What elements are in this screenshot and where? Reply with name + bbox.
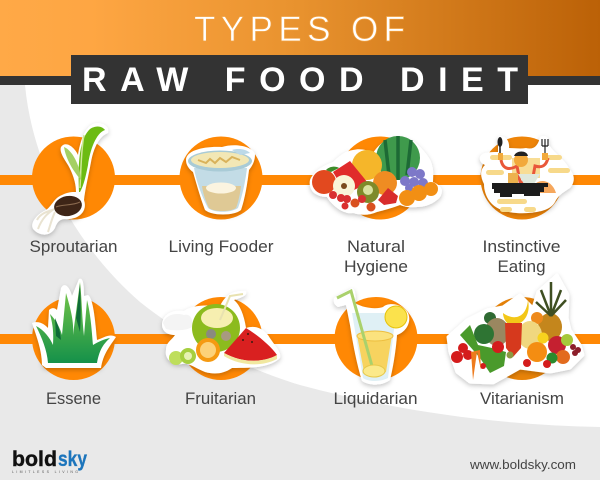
item: Fruitarian [162,291,280,408]
item: Sproutarian [30,123,118,256]
label: Living Fooder: Living Fooder [168,237,274,256]
item: Instinctive Eating [480,136,574,276]
title box [71,55,528,104]
icon: yogurt cup [186,145,255,214]
connector line: row 2 [0,334,600,344]
label: Liquidarian: Liquidarian [334,389,418,408]
logo: boldsky [12,448,87,474]
logo: boldsky: LIMITLESS LIVING [12,470,78,474]
item: Essene [32,279,116,408]
background: white curved panel [25,85,600,427]
item: Instinctive Eating: Eating [498,257,546,276]
icon: grass [32,279,116,368]
label: Vitarianism: Vitarianism [480,389,564,408]
logo: boldsky: bold [12,448,57,471]
title line 2: RAW FOOD DIET [82,61,518,99]
label: Sproutarian: Sproutarian [30,237,118,256]
connector line: row 1 [0,175,600,185]
icon: fruit pile [310,136,442,215]
item: Natural Hygiene: Hygiene [344,257,408,276]
item: Natural Hygiene [310,136,442,276]
item: Liquidarian [334,288,418,408]
label: Essene: Essene [46,389,101,408]
icon: coconut and fruits [162,291,280,373]
title line 1: TYPES OF [194,10,405,49]
website url: www.boldsky.com [469,457,576,472]
header banner [0,0,600,76]
header rule [0,76,600,85]
label: Fruitarian: Fruitarian [185,389,256,408]
label: Natural Hygiene: Natural [347,237,405,256]
label: Instinctive Eating: Instinctive [482,237,560,256]
icon: vegetables and fruits pile [448,275,583,383]
logo: boldsky: sky [58,448,87,471]
item: Vitarianism [448,275,583,408]
item: Living Fooder [168,136,274,256]
icon: lemonade glass [334,288,409,385]
icon: man eating [480,136,574,213]
icon: sprout [32,123,108,235]
